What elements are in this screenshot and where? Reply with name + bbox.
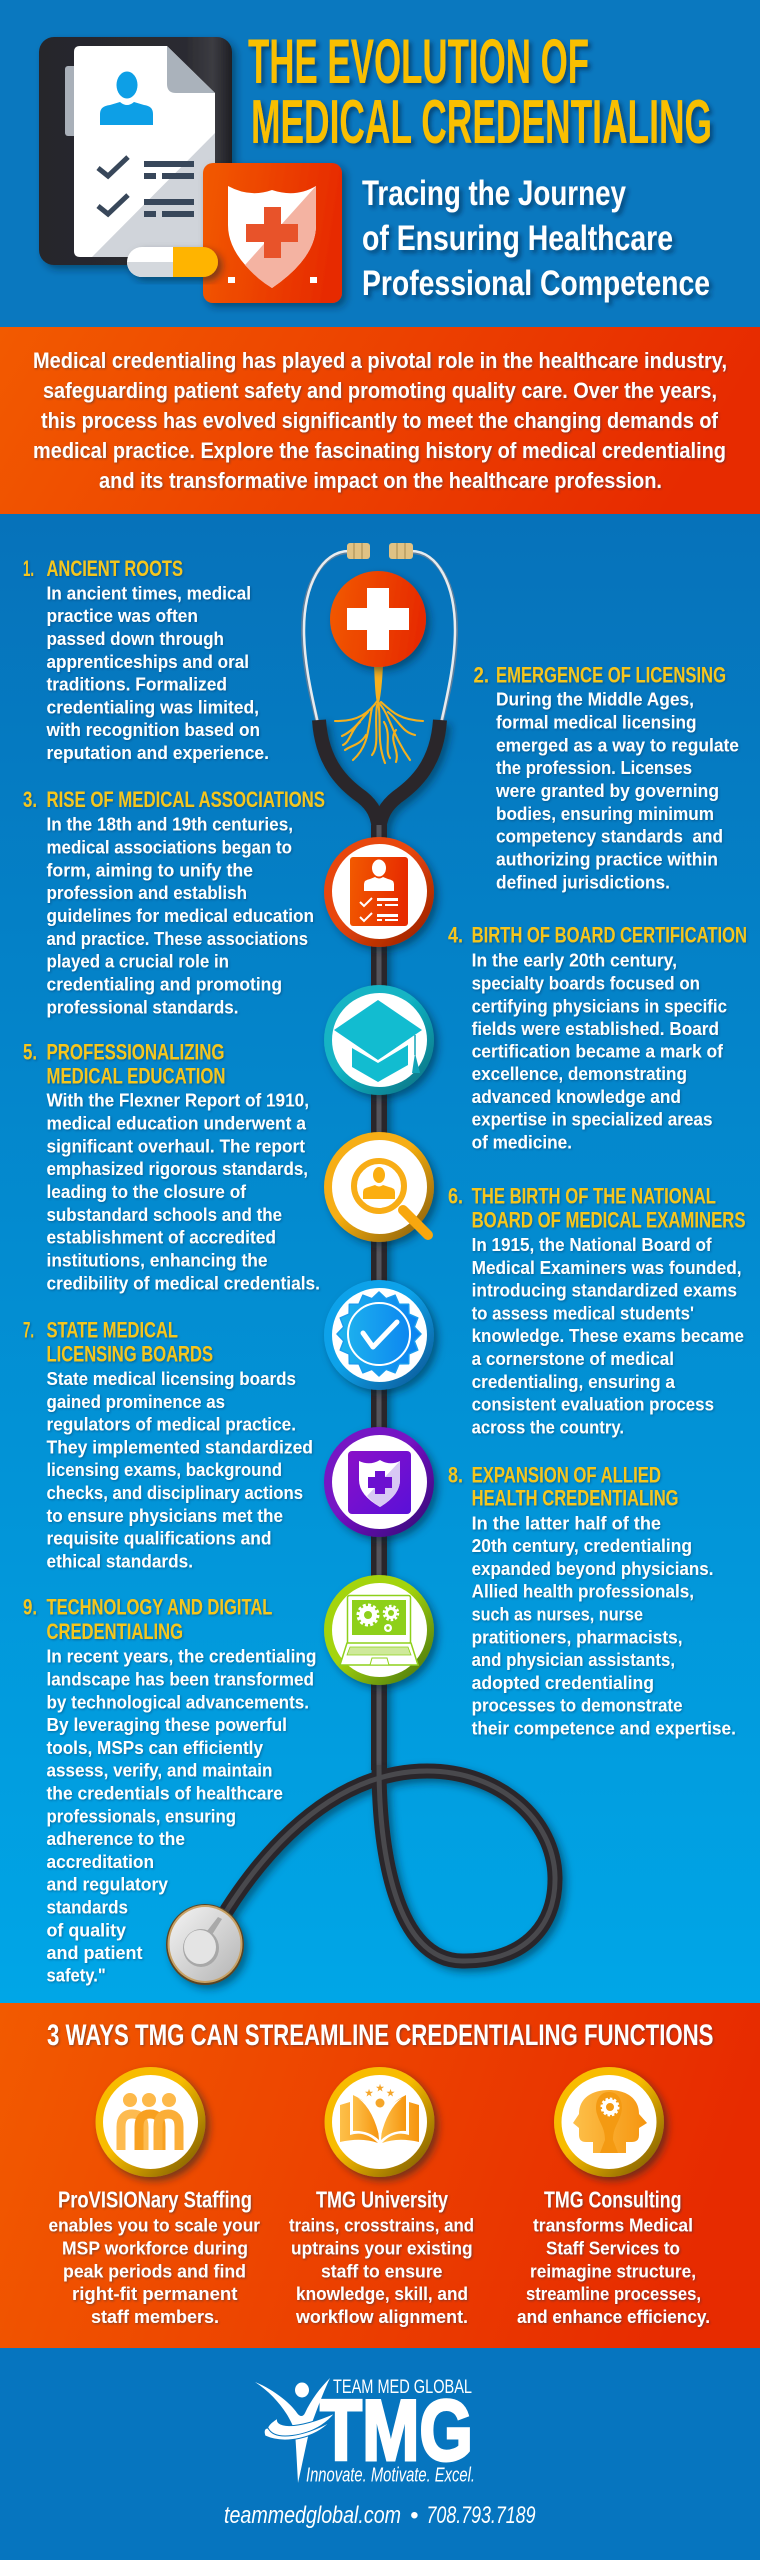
subtitle: of Ensuring Healthcare (362, 219, 673, 258)
body text: They implemented standardized (46, 1437, 313, 1457)
body text (46, 1369, 313, 1571)
column 1: ProVISIONary Staffing: right-fit permanent (72, 2284, 238, 2304)
body text: certification became a mark of (472, 1041, 724, 1061)
heading (23, 1594, 272, 1644)
body text (46, 583, 269, 763)
body text: advanced knowledge and (472, 1087, 681, 1107)
column 1: ProVISIONary Staffing: MSP workforce during (62, 2238, 248, 2258)
icon: capsule pill (127, 247, 218, 277)
body text: practice was often (46, 606, 198, 626)
section 7: state medical licensing boards (23, 1317, 313, 1571)
body text: were granted by governing (495, 781, 719, 801)
body text: credentialing was limited, (46, 698, 259, 718)
column 1: ProVISIONary Staffing (48, 2187, 260, 2327)
column 3: TMG Consulting: and enhance efficiency. (517, 2307, 710, 2327)
body text: checks, and disciplinary actions (46, 1483, 303, 1503)
body text: fields were established. Board (472, 1019, 719, 1039)
body text (472, 951, 727, 1152)
section 2: emergence of licensing (474, 662, 739, 892)
body text (46, 1091, 320, 1293)
heading: 8. (448, 1463, 463, 1488)
heading: 6. (448, 1183, 463, 1208)
body text: profession and establish (46, 883, 247, 903)
section 9: technology and digital credentialing (23, 1594, 316, 1986)
logo wordmark: TEAM MED GLOBAL (333, 2376, 472, 2398)
stethoscope: tube loop and lead to chest piece (222, 1765, 555, 1961)
column 3: TMG Consulting: transforms Medical (533, 2216, 693, 2236)
body text: authorizing practice within (496, 850, 718, 870)
body text: emphasized rigorous standards, (46, 1159, 308, 1179)
body text: defined jurisdictions. (496, 872, 670, 892)
body text: their competence and expertise. (472, 1718, 736, 1738)
body text (472, 1235, 744, 1437)
contact line: • (410, 2502, 418, 2529)
section 1: ancient roots (23, 556, 269, 763)
column 1: ProVISIONary Staffing: enables you to scale your (48, 2216, 260, 2236)
body text: the profession. Licenses (496, 758, 692, 778)
icon: credential profile medallion (324, 837, 434, 947)
column 1: ProVISIONary Staffing: ProVISIONary Staffing (58, 2187, 252, 2213)
body text: expanded beyond physicians. (472, 1559, 714, 1579)
body text: requisite qualifications and (46, 1529, 272, 1549)
body text: emerged as a way to regulate (496, 735, 739, 755)
body text (472, 1513, 736, 1738)
body text: institutions, enhancing the (46, 1250, 268, 1270)
body text (46, 815, 314, 1017)
body text: safety." (46, 1966, 106, 1986)
heading: 2. (474, 662, 489, 687)
body text: credibility of medical credentials. (46, 1273, 320, 1293)
heading: EXPANSION OF ALLIED (472, 1463, 661, 1488)
icon: clipboard with profile (39, 37, 232, 265)
stethoscope: ear tubes and tips (303, 543, 456, 724)
column 2: TMG University: knowledge, skill, and (296, 2284, 468, 2304)
body text: adherence to the (46, 1829, 185, 1849)
body text: professionals, ensuring (46, 1806, 236, 1826)
icon: graduation cap medallion (324, 985, 434, 1095)
icon: shield badge (203, 163, 342, 303)
logo TMG letters: TMG (320, 2383, 473, 2479)
heading: HEALTH CREDENTIALING (472, 1486, 679, 1511)
body text: professional standards. (46, 997, 238, 1017)
background: footer blue (0, 2348, 760, 2560)
body text: By leveraging these powerful (46, 1715, 287, 1735)
section 5: professionalizing medical education (23, 1039, 320, 1293)
contact line: 708.793.7189 (426, 2502, 536, 2529)
body text: standards (46, 1898, 128, 1918)
body text: knowledge. These exams became (472, 1326, 744, 1346)
icon: university book medallion: ★ (376, 2083, 385, 2093)
body text: consistent evaluation process (472, 1395, 714, 1415)
icon: magnifier medallion (324, 1132, 434, 1242)
body text: a cornerstone of medical (472, 1349, 674, 1369)
icon: university book medallion (324, 2067, 434, 2177)
icon: university book medallion: ★ (386, 2088, 395, 2098)
panel: three ways band (0, 2003, 760, 2348)
column 3: TMG Consulting: reimagine structure, (530, 2261, 696, 2281)
column 3: TMG Consulting: Staff Services to (546, 2238, 680, 2258)
body text: Medical Examiners was founded, (472, 1258, 742, 1278)
body text: licensing exams, background (46, 1460, 282, 1480)
body text: gained prominence as (46, 1392, 225, 1412)
body text: substandard schools and the (46, 1205, 282, 1225)
body text: played a crucial role in (46, 952, 229, 972)
heading: ANCIENT ROOTS (46, 556, 183, 581)
body text: across the country. (472, 1417, 624, 1437)
icon: university book medallion: ★ (365, 2088, 374, 2098)
icon: verified seal medallion (324, 1280, 434, 1390)
column 2: TMG University (289, 2187, 474, 2327)
body text: to assess medical students' (472, 1303, 694, 1323)
body text: and practice. These associations (46, 929, 308, 949)
body text: the credentials of healthcare (46, 1784, 283, 1804)
body text: introducing standardized exams (472, 1281, 737, 1301)
body text: reputation and experience. (46, 743, 269, 763)
heading: PROFESSIONALIZING (46, 1039, 224, 1064)
body text: form, aiming to unify the (46, 860, 253, 880)
body text: ethical standards. (46, 1551, 193, 1571)
column 2: TMG University: uptrains your existing (291, 2238, 473, 2258)
body text: Allied health professionals, (472, 1582, 694, 1602)
heading: LICENSING BOARDS (46, 1342, 213, 1367)
body text: tools, MSPs can efficiently (46, 1738, 263, 1758)
body text: In the latter half of the (472, 1513, 661, 1533)
body text: 20th century, credentialing (472, 1536, 692, 1556)
heading: RISE OF MEDICAL ASSOCIATIONS (46, 787, 325, 812)
logo: Team Med Global TMG (255, 2376, 475, 2487)
column 2: TMG University: TMG University (316, 2187, 448, 2213)
body text: of quality (46, 1920, 126, 1940)
body text: regulators of medical practice. (46, 1415, 296, 1435)
heading (448, 1463, 679, 1511)
column 3: TMG Consulting: TMG Consulting (544, 2187, 682, 2213)
body text: adopted credentialing (472, 1673, 654, 1693)
icon: laptop medallion (324, 1575, 434, 1685)
body text: excellence, demonstrating (472, 1064, 687, 1084)
body text: With the Flexner Report of 1910, (46, 1091, 309, 1111)
contact line (224, 2502, 536, 2529)
contact line: teammedglobal.com (224, 2502, 401, 2529)
column 2: TMG University: workflow alignment. (295, 2307, 468, 2327)
body text: accreditation (46, 1852, 154, 1872)
heading: STATE MEDICAL (46, 1317, 178, 1342)
panel: intro band (0, 327, 760, 514)
body text: landscape has been transformed (46, 1670, 314, 1690)
body text (495, 690, 739, 892)
body text: In recent years, the credentialing (46, 1647, 316, 1667)
body text: medical associations began to (46, 838, 292, 858)
body text: such as nurses, nurse (472, 1604, 643, 1624)
heading: 3. (23, 787, 37, 812)
body text: by technological advancements. (46, 1692, 309, 1712)
intro text (33, 348, 727, 493)
body text: of medicine. (472, 1132, 572, 1152)
icon: team staffing medallion (96, 2067, 206, 2177)
subtitle (362, 174, 710, 303)
section 4: birth of board certification (448, 923, 747, 1152)
intro text: and its transformative impact on the healthcare profession. (99, 468, 662, 493)
logo tagline: Innovate. Motivate. Excel. (306, 2465, 475, 2487)
heading (23, 1317, 213, 1367)
column 1: ProVISIONary Staffing: peak periods and find (63, 2261, 246, 2281)
heading: TECHNOLOGY AND DIGITAL (46, 1594, 272, 1619)
body text: significant overhaul. The report (46, 1136, 305, 1156)
body text: In ancient times, medical (46, 583, 251, 603)
body text: expertise in specialized areas (472, 1110, 712, 1130)
section 8: expansion of allied health credentialing (448, 1463, 736, 1738)
heading: MEDICAL EDUCATION (46, 1063, 226, 1088)
body text: bodies, ensuring minimum (496, 804, 714, 824)
subtitle: Tracing the Journey (362, 174, 626, 213)
heading: 7. (23, 1317, 34, 1342)
heading: 4. (448, 923, 463, 948)
body text: competency standards and (496, 827, 723, 847)
body text: establishment of accredited (46, 1228, 276, 1248)
heading (448, 1183, 746, 1232)
column 3: TMG Consulting: streamline processes, (526, 2284, 701, 2304)
heading: CREDENTIALING (46, 1619, 183, 1644)
column 3: TMG Consulting (517, 2187, 710, 2327)
body text: certifying physicians in specific (472, 996, 727, 1016)
body text: During the Middle Ages, (496, 690, 694, 710)
body text: pratitioners, pharmacists, (472, 1627, 682, 1647)
body text: traditions. Formalized (46, 674, 227, 694)
body text: assess, verify, and maintain (46, 1761, 272, 1781)
icon: shield medallion (324, 1427, 434, 1537)
body text: State medical licensing boards (46, 1369, 296, 1389)
title (248, 27, 712, 157)
heading (23, 1039, 226, 1088)
body text: formal medical licensing (496, 712, 696, 732)
body text: credentialing and promoting (46, 974, 282, 994)
body text: and patient (46, 1943, 142, 1963)
body text: guidelines for medical education (46, 906, 314, 926)
background: timeline blue gradient (0, 514, 760, 2004)
column 1: ProVISIONary Staffing: staff members. (91, 2307, 219, 2327)
heading: 9. (23, 1594, 37, 1619)
body text: In the 18th and 19th centuries, (46, 815, 293, 835)
stethoscope: binaural Y and stem (319, 720, 440, 1770)
icon: consulting heads medallion (554, 2067, 664, 2177)
body text: and regulatory (46, 1875, 168, 1895)
background: header blue (0, 0, 760, 328)
body text: to ensure physicians met the (46, 1506, 283, 1526)
icon: ancient roots medallion (330, 571, 426, 763)
body text: specialty boards focused on (472, 974, 700, 994)
heading: 5. (23, 1039, 37, 1064)
body text: passed down through (46, 629, 224, 649)
section 3: rise of medical associations (23, 787, 325, 1017)
body text: with recognition based on (46, 720, 260, 740)
column 2: TMG University: staff to ensure (321, 2261, 442, 2281)
heading: 1. (23, 556, 34, 581)
body text: leading to the closure of (46, 1182, 247, 1202)
body text: apprenticeships and oral (46, 652, 249, 672)
heading (23, 556, 183, 581)
body text (46, 1647, 316, 1986)
column 2: TMG University: trains, crosstrains, and (289, 2216, 474, 2236)
logo figure (255, 2378, 335, 2483)
body text: processes to demonstrate (472, 1696, 682, 1716)
body text: credentialing, ensuring a (472, 1372, 676, 1392)
body text: medical education underwent a (46, 1114, 307, 1134)
stethoscope: chest piece (166, 1904, 244, 1985)
body text: and physician assistants, (472, 1650, 675, 1670)
section 6: national board of medical examiners (448, 1183, 746, 1437)
body text: In the early 20th century, (472, 951, 677, 971)
body text: In 1915, the National Board of (472, 1235, 713, 1255)
